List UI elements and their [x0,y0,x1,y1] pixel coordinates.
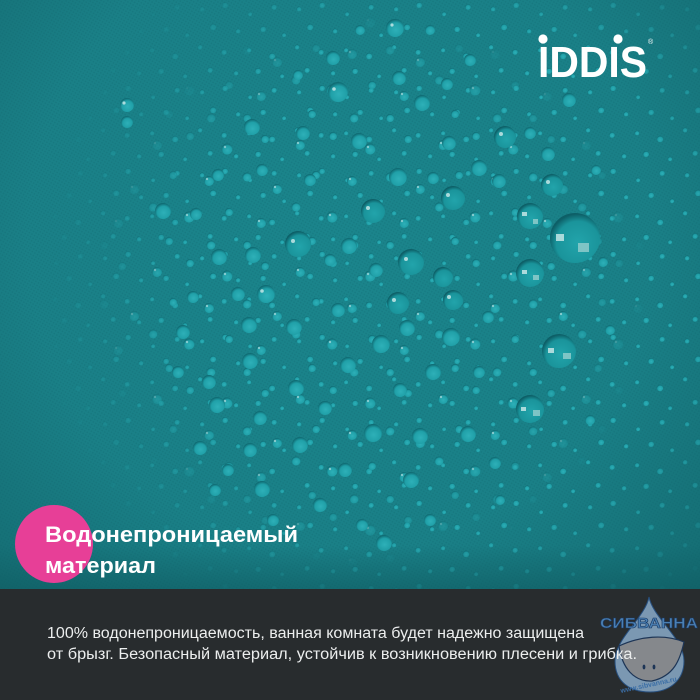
bottom shading [0,430,700,590]
watermark: Sibvanna [600,597,699,695]
pink accent circle [15,505,93,583]
watermark url: www.sibvanna.ru [619,676,677,695]
droplet highlights [122,23,589,416]
body text: от брызг. Безопасный материал, устойчив к возникновению плесени и грибка. [47,646,637,663]
large water droplets [285,126,600,423]
dark bottom panel [0,589,700,700]
medium water droplets [120,19,615,551]
tiny water droplets [68,2,700,589]
body text: 100% водонепроницаемость, ванная комната будет надежно защищена [47,625,584,642]
logo: IDDIS: IDDIS [538,38,647,87]
watermark drop [615,597,684,692]
heading: Водонепроницаемый [45,522,298,547]
watermark bath [619,637,684,681]
logo: IDDIS: ® [648,38,654,46]
small water droplets [105,19,637,561]
heading: материал [45,553,156,578]
watermark face [643,665,655,669]
watermark brand name: СИБВАННА [600,616,699,632]
